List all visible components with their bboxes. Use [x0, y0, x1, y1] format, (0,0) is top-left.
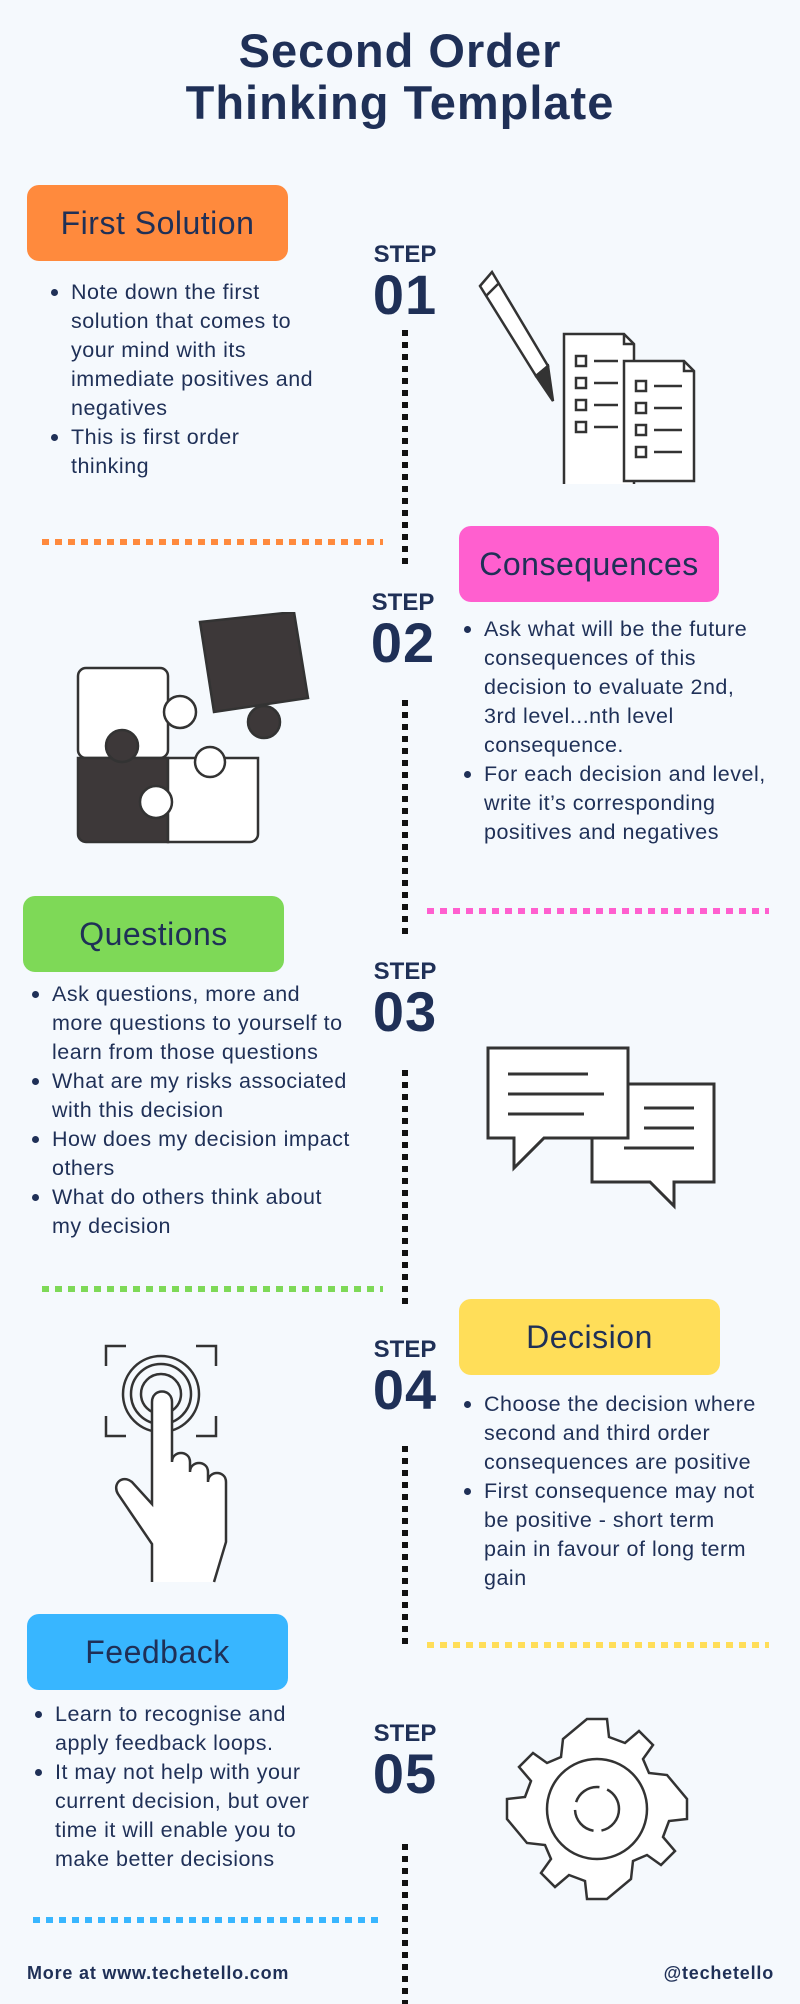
step 5 label: STEP: [374, 1720, 436, 1747]
step 2 label: STEP: [372, 589, 434, 616]
step 5 bullets: [35, 1702, 309, 1871]
step 1 bullets: your mind with its: [71, 338, 246, 362]
step 4 bullets: consequences are positive: [484, 1450, 751, 1474]
step 1 bullets: immediate positives and: [71, 367, 313, 391]
step 1 bullets: negatives: [71, 396, 168, 420]
step 4 label: 04: [373, 1358, 437, 1421]
step 5 bullets: Learn to recognise and: [55, 1702, 286, 1726]
step 3 bullets: Ask questions, more and: [52, 982, 300, 1006]
panel: step 4 heading: Decision: [526, 1318, 653, 1354]
step 2 bullets: For each decision and level,: [484, 762, 766, 786]
step 5 label: 05: [373, 1742, 437, 1805]
footer: handle: @techetello: [664, 1963, 774, 1983]
step 1 bullets: thinking: [71, 454, 149, 478]
step 3 label: 03: [373, 980, 437, 1043]
icon: pen and papers: [478, 270, 696, 484]
step 1 label: STEP: [374, 241, 436, 268]
step 1 bullets: solution that comes to: [71, 309, 291, 333]
panel: step 5 heading: Feedback: [85, 1634, 230, 1670]
title: [186, 24, 614, 129]
step 4 bullets: be positive - short term: [484, 1508, 715, 1532]
title: Second Order: [239, 24, 561, 77]
step 3 bullets: learn from those questions: [52, 1040, 318, 1064]
step 3 bullets: [32, 982, 350, 1238]
step 2 bullets: consequence.: [484, 733, 624, 757]
step 3 bullets: more questions to yourself to: [52, 1011, 343, 1035]
divider: green: [42, 1286, 383, 1292]
step 3 label: STEP: [374, 958, 436, 985]
step 1 label: 01: [373, 263, 437, 326]
panel: step 2 heading: [459, 526, 719, 602]
step 4 bullets: second and third order: [484, 1421, 710, 1445]
step 2 bullets: write it’s corresponding: [484, 791, 715, 815]
step 4 bullets: [464, 1392, 756, 1590]
divider: orange: [42, 539, 383, 545]
divider: yellow: [427, 1642, 769, 1648]
icon: touch hand: [104, 1344, 228, 1582]
step 2 label: 02: [371, 611, 435, 674]
step 2 bullets: decision to evaluate 2nd,: [484, 675, 734, 699]
vertical timeline segments: [402, 330, 408, 570]
panel: step 1 heading: [27, 185, 288, 261]
step 3 bullets: others: [52, 1156, 115, 1180]
step 4 bullets: pain in favour of long term: [484, 1537, 746, 1561]
step 2 bullets: consequences of this: [484, 646, 696, 670]
panel: step 5 heading: [27, 1614, 288, 1690]
panel: step 3 heading: [23, 896, 284, 972]
panel: step 1 heading: First Solution: [61, 204, 254, 240]
panel: step 4 heading: [459, 1299, 720, 1375]
step 4 label: STEP: [374, 1336, 436, 1363]
step 1 bullets: Note down the first: [71, 280, 260, 304]
step 2 bullets: 3rd level...nth level: [484, 704, 674, 728]
step 3 bullets: How does my decision impact: [52, 1127, 350, 1151]
divider: blue: [33, 1917, 378, 1923]
step 4 bullets: gain: [484, 1566, 527, 1590]
step 3 bullets: What are my risks associated: [52, 1069, 347, 1093]
panel: step 2 heading: Consequences: [479, 546, 699, 582]
icon: chat bubbles: [486, 1046, 716, 1210]
title: Thinking Template: [186, 76, 614, 129]
step 4 bullets: Choose the decision where: [484, 1392, 756, 1416]
step 1 bullets: [51, 280, 313, 478]
step 3 bullets: my decision: [52, 1214, 171, 1238]
step 5 bullets: current decision, but over: [55, 1789, 309, 1813]
step 5 bullets: apply feedback loops.: [55, 1731, 273, 1755]
icon: puzzle: [76, 612, 310, 844]
step 1 bullets: This is first order: [71, 425, 239, 449]
divider: pink: [427, 908, 769, 914]
step 5 bullets: time it will enable you to: [55, 1818, 296, 1842]
step 5 bullets: make better decisions: [55, 1847, 275, 1871]
footer: website: More at www.techetello.com: [27, 1963, 289, 1983]
step 2 bullets: [464, 617, 766, 844]
step 2 bullets: Ask what will be the future: [484, 617, 747, 641]
step 2 bullets: positives and negatives: [484, 820, 719, 844]
icon: gear: [506, 1718, 688, 1900]
step 3 bullets: with this decision: [52, 1098, 224, 1122]
step 4 bullets: First consequence may not: [484, 1479, 755, 1503]
step 3 bullets: What do others think about: [52, 1185, 322, 1209]
panel: step 3 heading: Questions: [79, 916, 228, 952]
step 5 bullets: It may not help with your: [55, 1760, 301, 1784]
